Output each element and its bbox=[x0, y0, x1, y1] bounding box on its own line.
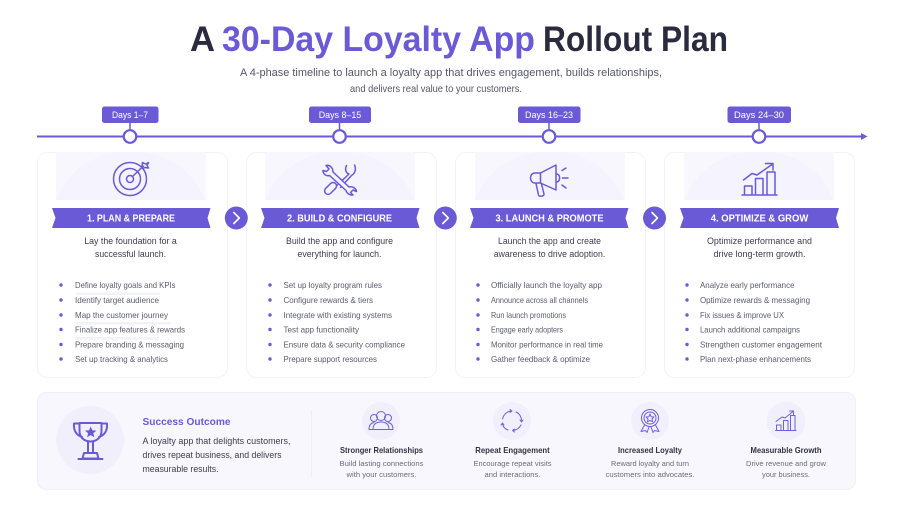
checklist: Prepare support resources bbox=[284, 354, 377, 364]
outcome: stronger relationships: with your customers. bbox=[345, 470, 416, 479]
banner: optimize & grow: 4. OPTIMIZE & GROW bbox=[711, 214, 809, 224]
checklist: Optimize rewards & messaging bbox=[700, 295, 810, 305]
outcome: stronger relationships: Stronger Relationships bbox=[340, 446, 423, 455]
checklist: Set up loyalty program rules bbox=[284, 280, 382, 290]
checklist: Prepare branding & messaging bbox=[75, 340, 184, 350]
title bbox=[190, 20, 728, 59]
checklist: Officially launch the loyalty app bbox=[491, 280, 602, 290]
panel: success outcome bbox=[38, 392, 856, 490]
checklist: Announce across all channels bbox=[491, 295, 588, 305]
description: successful launch. bbox=[95, 249, 166, 259]
success outcome text: drives repeat business, and delivers bbox=[142, 450, 282, 460]
outcome: measurable growth: Measurable Growth bbox=[750, 446, 822, 455]
timeline marker: days 8-15: Days 8–15 bbox=[319, 110, 361, 120]
outcome: measurable growth: Drive revenue and grow bbox=[746, 459, 827, 468]
panel: build & configure bbox=[246, 151, 436, 378]
description: drive long-term growth. bbox=[714, 249, 806, 259]
success outcome text: A loyalty app that delights customers, bbox=[142, 436, 290, 446]
banner: build & configure bbox=[261, 208, 420, 228]
outcome: increased loyalty: customers into advocates. bbox=[606, 470, 694, 479]
description: Build the app and configure bbox=[286, 236, 393, 246]
title: Rollout Plan bbox=[543, 20, 728, 59]
arrow: step 2 to 3 bbox=[434, 206, 457, 230]
outcome: measurable growth bbox=[746, 402, 827, 479]
checklist: Finalize app features & rewards bbox=[75, 324, 185, 334]
icon: trophy bbox=[56, 406, 124, 474]
checklist bbox=[268, 280, 405, 364]
description: Launch the app and create bbox=[498, 236, 601, 246]
banner: optimize & grow bbox=[680, 208, 839, 228]
description: Lay the foundation for a bbox=[84, 236, 177, 246]
timeline marker: days 24-30 bbox=[728, 106, 791, 143]
checklist: Run launch promotions bbox=[491, 310, 566, 320]
checklist: Set up tracking & analytics bbox=[75, 354, 168, 364]
checklist: Monitor performance in real time bbox=[491, 340, 603, 350]
timeline marker: days 24-30: Days 24–30 bbox=[734, 110, 784, 120]
subtitle: A 4-phase timeline to launch a loyalty app that drives engagement, builds relationships, bbox=[240, 67, 662, 79]
subtitle bbox=[240, 67, 662, 95]
banner: plan & prepare: 1. PLAN & PREPARE bbox=[87, 214, 175, 224]
description bbox=[707, 236, 812, 259]
timeline marker: days 8-15 bbox=[309, 106, 371, 143]
timeline marker: days 1-7 bbox=[102, 106, 158, 143]
description bbox=[84, 236, 177, 259]
icon: tools bbox=[323, 165, 356, 196]
icon: target bbox=[114, 162, 148, 196]
checklist: Strengthen customer engagement bbox=[700, 340, 823, 350]
checklist: Identify target audience bbox=[75, 295, 159, 305]
checklist bbox=[685, 280, 823, 364]
outcome: increased loyalty: Reward loyalty and turn bbox=[611, 459, 689, 468]
checklist: Define loyalty goals and KPIs bbox=[75, 280, 176, 290]
timeline marker: days 16-23 bbox=[518, 106, 580, 143]
checklist: Gather feedback & optimize bbox=[491, 354, 590, 364]
outcome: increased loyalty bbox=[606, 402, 694, 479]
description: awareness to drive adoption. bbox=[494, 249, 605, 259]
description: Optimize performance and bbox=[707, 236, 812, 246]
outcome: repeat engagement: Encourage repeat visits bbox=[474, 459, 552, 468]
checklist: Analyze early performance bbox=[700, 280, 795, 290]
panel: optimize & grow bbox=[664, 151, 854, 378]
checklist: Ensure data & security compliance bbox=[284, 340, 405, 350]
checklist: Configure rewards & tiers bbox=[284, 295, 373, 305]
checklist: Test app functionality bbox=[284, 324, 360, 334]
banner: launch & promote bbox=[470, 208, 628, 228]
checklist: Integrate with existing systems bbox=[284, 310, 392, 320]
description bbox=[494, 236, 605, 259]
checklist bbox=[476, 280, 603, 364]
outcome: stronger relationships bbox=[340, 402, 424, 479]
icon: growth chart bbox=[742, 164, 777, 195]
checklist: Fix issues & improve UX bbox=[700, 310, 784, 320]
outcome: repeat engagement bbox=[474, 402, 552, 479]
outcome: repeat engagement: and interactions. bbox=[484, 470, 540, 479]
checklist: Plan next-phase enhancements bbox=[700, 354, 811, 364]
outcome: increased loyalty: Increased Loyalty bbox=[618, 446, 682, 455]
banner: build & configure: 2. BUILD & CONFIGURE bbox=[287, 214, 392, 224]
outcome: stronger relationships: Build lasting connections bbox=[340, 459, 424, 468]
title: A bbox=[190, 20, 215, 59]
title: 30-Day Loyalty App bbox=[222, 20, 535, 59]
banner: plan & prepare bbox=[52, 208, 210, 228]
banner: launch & promote: 3. LAUNCH & PROMOTE bbox=[496, 214, 604, 224]
panel: plan & prepare bbox=[38, 151, 228, 378]
checklist: Engage early adopters bbox=[491, 324, 563, 334]
outcome: repeat engagement: Repeat Engagement bbox=[475, 446, 550, 455]
checklist bbox=[59, 280, 185, 364]
icon: megaphone bbox=[530, 165, 568, 196]
timeline marker: days 1-7: Days 1–7 bbox=[112, 110, 148, 120]
success outcome text: Success Outcome bbox=[142, 416, 231, 428]
timeline arrow bbox=[37, 133, 868, 140]
description: everything for launch. bbox=[298, 249, 382, 259]
description bbox=[286, 236, 393, 259]
success outcome text bbox=[142, 416, 290, 474]
success outcome text: measurable results. bbox=[142, 464, 218, 474]
outcome: measurable growth: your business. bbox=[762, 470, 810, 479]
timeline marker: days 16-23: Days 16–23 bbox=[525, 110, 573, 120]
subtitle: and delivers real value to your customers. bbox=[350, 84, 522, 95]
arrow: step 3 to 4 bbox=[643, 206, 666, 230]
checklist: Map the customer journey bbox=[75, 310, 169, 320]
checklist: Launch additional campaigns bbox=[700, 324, 800, 334]
panel: launch & promote bbox=[456, 151, 646, 378]
arrow: step 1 to 2 bbox=[225, 206, 248, 230]
